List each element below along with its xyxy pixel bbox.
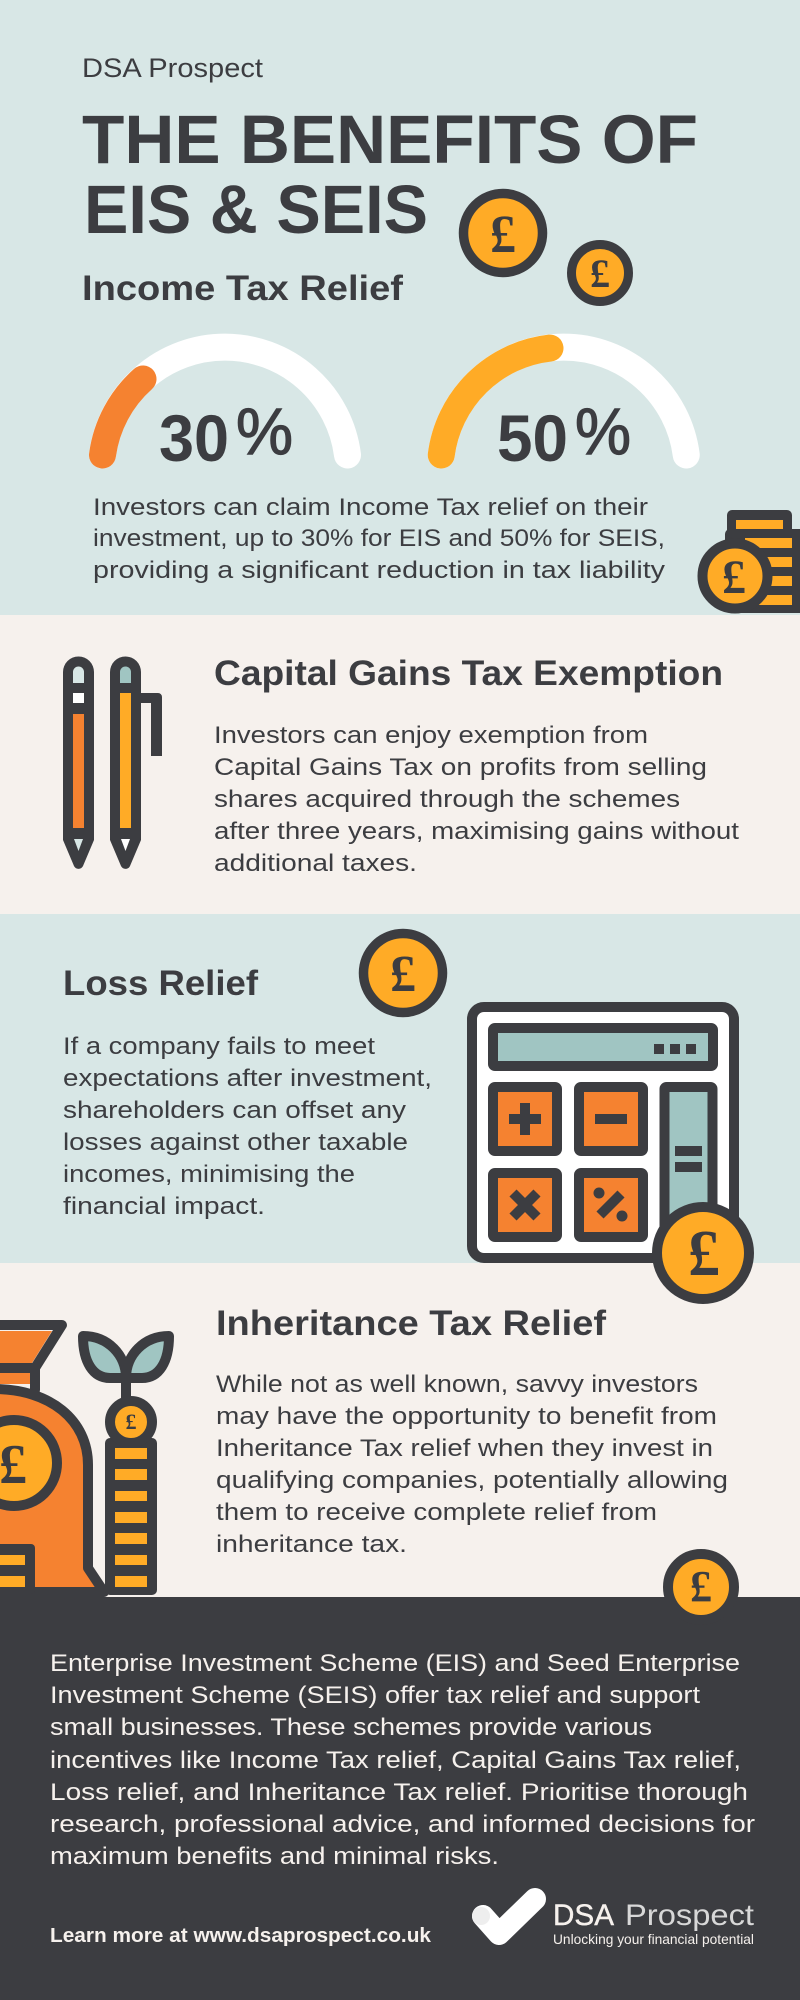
gauge: 30% (102, 347, 348, 475)
text block: summary: maximum benefits and minimal risks. (50, 1843, 499, 1870)
text block: summary: incentives like Income Tax relief, Capital Gains Tax relief, (50, 1747, 741, 1774)
text block: inheritance: Inheritance Tax relief when they invest in (216, 1435, 713, 1462)
logo (472, 1899, 755, 1947)
text block: summary: Enterprise Investment Scheme (EIS) and Seed Enterprise (50, 1650, 740, 1677)
heading: inheritance: Inheritance Tax Relief (216, 1304, 606, 1343)
text block: loss relief: incomes, minimising the (63, 1161, 355, 1188)
logo: Prospect (625, 1899, 755, 1932)
icon: large coin: £ (490, 204, 516, 264)
text block: capital gains: Capital Gains Tax on profits from selling (214, 754, 707, 781)
text block: income tax relief (93, 494, 666, 584)
panel: income tax relief (0, 0, 800, 615)
brand label: DSA Prospect (82, 53, 264, 83)
icon: coin stack (702, 510, 800, 613)
gauge: 30%: % (236, 394, 293, 468)
panel: capital gains tax exemption (0, 615, 800, 914)
heading: capital gains: Capital Gains Tax Exemption (214, 654, 723, 693)
text block: summary: small businesses. These schemes provide various (50, 1714, 652, 1741)
call to action: Learn more at www.dsaprospect.co.uk (50, 1925, 432, 1947)
icon: small coin: £ (590, 251, 610, 296)
panel: inheritance tax relief (0, 1263, 800, 1597)
text block: inheritance: may have the opportunity to benefit from (216, 1403, 717, 1430)
text block: income tax relief: investment, up to 30% for EIS and 50% for SEIS, (93, 525, 665, 552)
icon: coin: £ (390, 946, 416, 1003)
icon: calculator: £ (688, 1217, 720, 1290)
text block: income tax relief: providing a significant reduction in tax liability (93, 557, 666, 584)
text block: inheritance: inheritance tax. (216, 1531, 407, 1558)
heading: income tax relief: Income Tax Relief (82, 269, 403, 308)
text block: summary: Loss relief, and Inheritance Tax relief. Prioritise thorough (50, 1779, 748, 1806)
icon: money bag (0, 1325, 104, 1594)
text block: loss relief: shareholders can offset any (63, 1097, 407, 1124)
icon: pencils (63, 656, 162, 869)
text block: capital gains: Investors can enjoy exemption from (214, 722, 648, 749)
title (82, 101, 698, 248)
gauge: 50% (441, 347, 686, 475)
text block: inheritance: While not as well known, savvy investors (216, 1371, 698, 1398)
icon: calculator (472, 1007, 749, 1299)
gauge: 30%: 30 (159, 401, 229, 475)
panel: summary footer (0, 1597, 800, 2000)
icon: coin (364, 934, 442, 1012)
icon: coin on footer edge: £ (690, 1562, 712, 1611)
text block: loss relief: losses against other taxable (63, 1129, 408, 1156)
icon: large coin (464, 194, 542, 272)
text block: loss relief: If a company fails to meet (63, 1033, 375, 1060)
text block: summary (50, 1650, 755, 1870)
heading: loss relief: Loss Relief (63, 964, 258, 1003)
text block: capital gains: after three years, maximising gains without (214, 818, 739, 845)
text block: summary: Investment Scheme (SEIS) offer tax relief and support (50, 1682, 700, 1709)
text block: income tax relief: Investors can claim Income Tax relief on their (93, 494, 648, 521)
icon: coin plant (83, 1336, 169, 1595)
logo: Unlocking your financial potential (553, 1931, 754, 1947)
text block: capital gains: additional taxes. (214, 850, 417, 877)
text block: capital gains: shares acquired through the schemes (214, 786, 680, 813)
logo: DSA (553, 1899, 614, 1932)
icon: coin plant: £ (126, 1409, 136, 1434)
title: EIS & SEIS (84, 171, 428, 248)
text block: inheritance (216, 1371, 728, 1558)
gauge: 50%: 50 (497, 401, 568, 475)
icon: small coin (572, 244, 628, 302)
text block: inheritance: them to receive complete relief from (216, 1499, 657, 1526)
title: THE BENEFITS OF (82, 101, 698, 178)
gauge: 50%: % (575, 394, 631, 468)
icon: coin stack: £ (722, 551, 746, 604)
panel: loss relief (0, 914, 800, 1263)
text block: capital gains (214, 722, 739, 877)
text block: loss relief: financial impact. (63, 1193, 265, 1220)
text block: summary: research, professional advice, and informed decisions for (50, 1811, 755, 1838)
text block: loss relief (63, 1033, 432, 1220)
text block: loss relief: expectations after investment, (63, 1065, 432, 1092)
icon: coin on footer edge (668, 1554, 734, 1620)
text block: inheritance: qualifying companies, potentially allowing (216, 1467, 728, 1494)
